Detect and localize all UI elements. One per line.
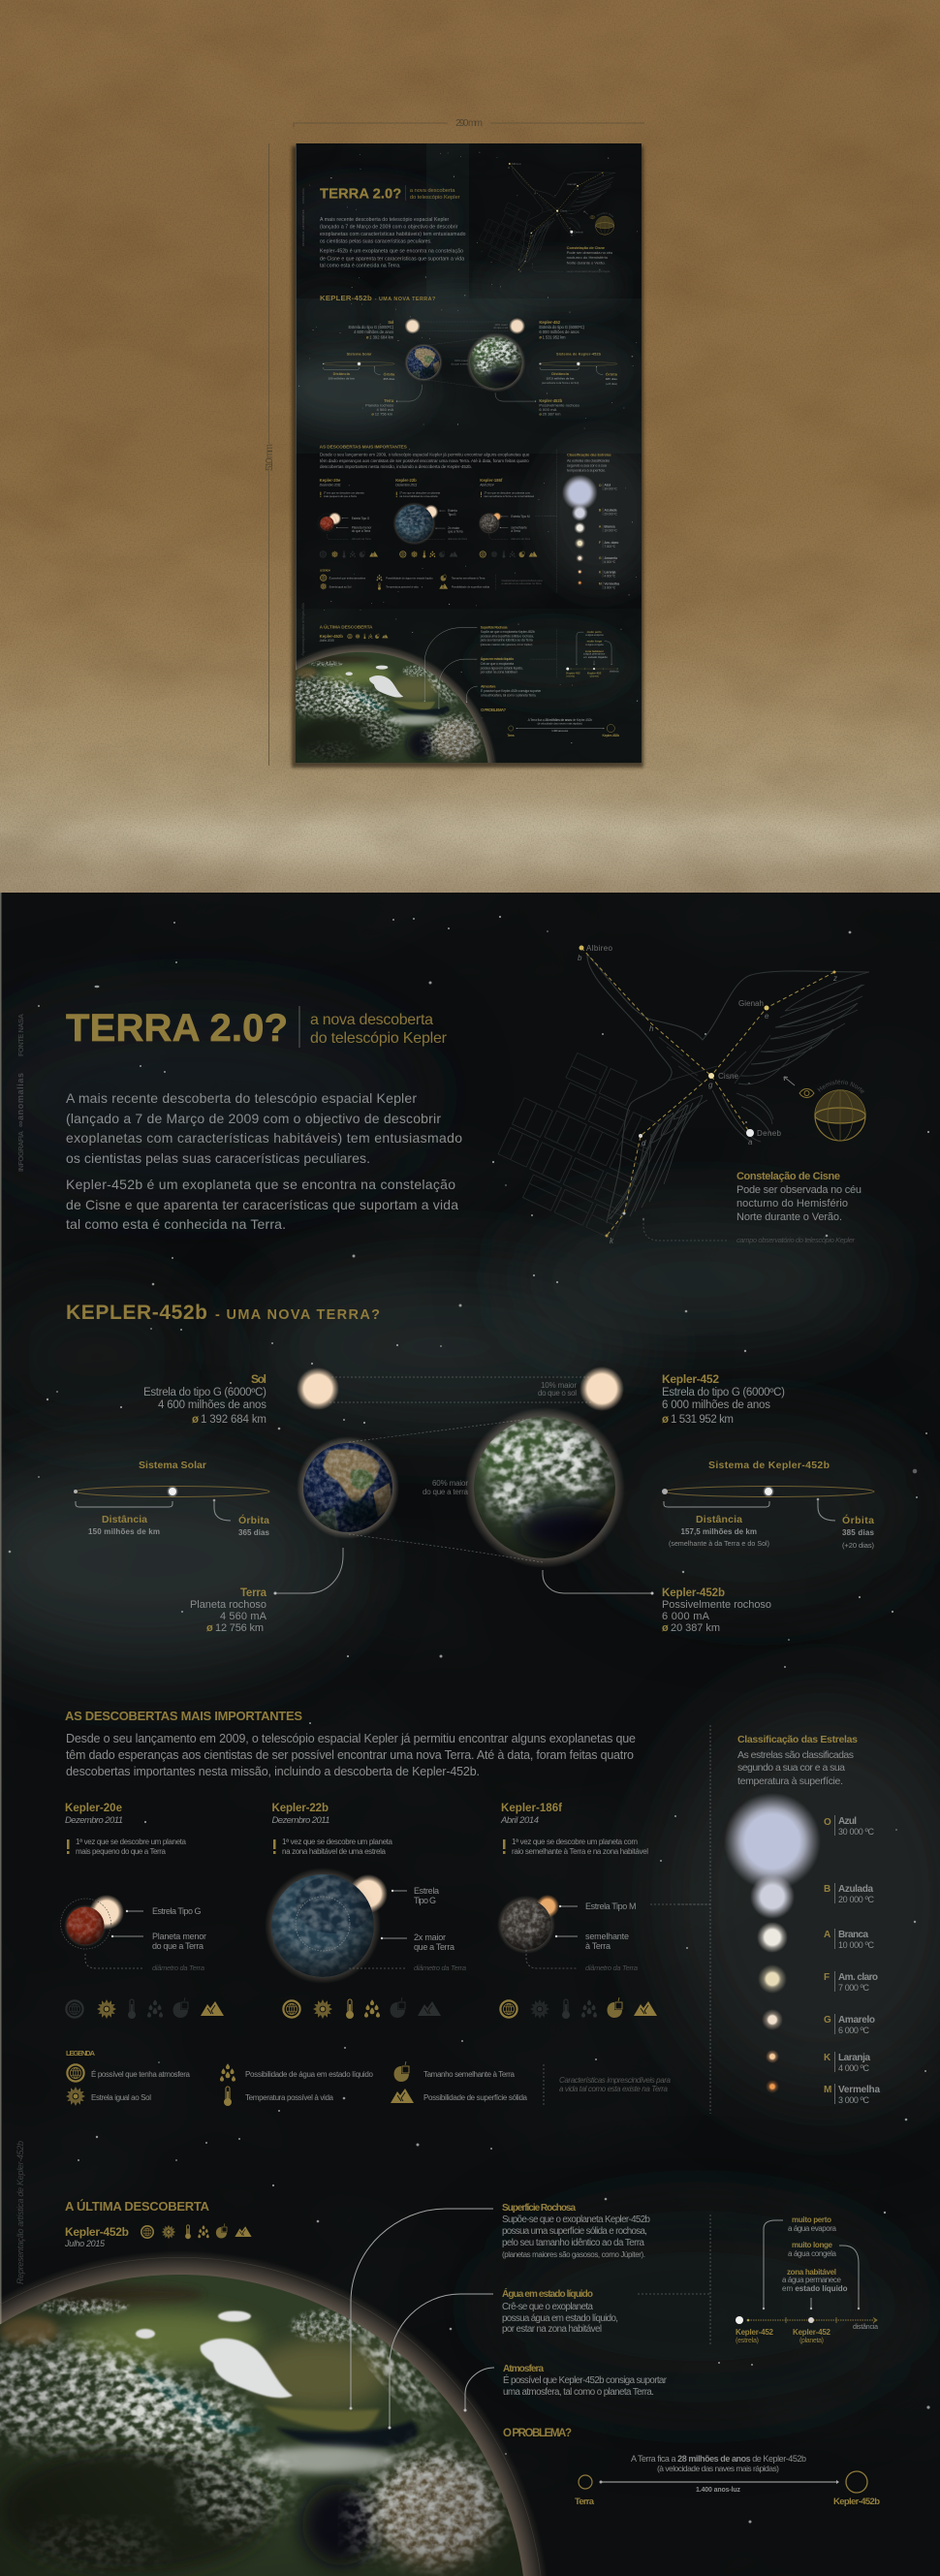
orbit (74, 1487, 269, 1496)
note: 1ª vez que se descobre um planeta (282, 1838, 393, 1846)
Kepler-452b info: 6 000 mA (662, 1611, 710, 1622)
callout: Água em estado líquido: Água em estado líquido (502, 2287, 593, 2300)
labels: à Terra (585, 1941, 611, 1951)
land colours (0, 2284, 494, 2573)
O problema: O PROBLEMA? (503, 2428, 572, 2439)
section: A última descoberta: Julho 2015 (64, 2239, 106, 2248)
habitable zone diagram: em estado líquido (782, 2284, 848, 2293)
Terra info: 4 560 mA (220, 1611, 267, 1622)
Kepler-452 info (662, 1372, 785, 1426)
callout: Atmosfera (463, 2364, 668, 2411)
Terra info: Planeta rochoso (190, 1599, 266, 1611)
planet (497, 1896, 555, 1954)
intro text: de Cisne e que aparenta ter caracerísticas que suportam a vida (66, 1197, 458, 1212)
note: 1ª vez que se descobre um planeta com (512, 1838, 638, 1846)
clouds (0, 2300, 504, 2565)
star (89, 1895, 124, 1930)
callout: Atmosfera: Atmosfera (503, 2364, 544, 2374)
callout: Superfície Rochosa: (planetas maiores são gasosos, como Júpiter). (502, 2250, 645, 2259)
callout: Atmosfera: É possível que Kepler-452b consiga suportar (503, 2375, 668, 2386)
title: a nova descoberta (310, 1012, 433, 1028)
legend: LEGENDA (66, 2049, 96, 2058)
discovery: Kepler-22b: Dezembro 2011 (271, 1815, 329, 1826)
labels: Estrela Tipo G (152, 1906, 202, 1916)
main infographic (0, 893, 940, 2576)
labels (526, 1901, 710, 1972)
panel: star classification: Classificação das Estrelas (737, 1734, 858, 1745)
poster miniature (274, 143, 659, 763)
class labels (824, 1815, 880, 2105)
Sistema de Kepler-452b diagram: 157,5 milhões de km (680, 1527, 757, 1536)
star sizes (724, 1793, 821, 2093)
characteristics icons (66, 1997, 224, 2019)
discovery: Kepler-186f (497, 1803, 710, 2019)
dimension: width 290 mm (294, 118, 644, 129)
constellation labels: g (708, 1081, 713, 1089)
constellation labels: Gienah (738, 999, 764, 1008)
swan outline (587, 955, 869, 1223)
Terra circle (579, 2475, 592, 2489)
Sol info: Sol (251, 1372, 266, 1386)
section: As descobertas: AS DESCOBERTAS MAIS IMPORTANTES (65, 1709, 302, 1723)
O problema: Terra (575, 2497, 595, 2507)
legend: a vida tal como esta existe na Terra (559, 2085, 669, 2093)
discovery: Kepler-186f: Abril 2014 (500, 1815, 539, 1826)
callout: Água em estado líquido: possua água em estado líquido, (502, 2313, 618, 2324)
note (503, 1838, 648, 1856)
class labels: Azul (838, 1816, 857, 1827)
comparison notes: do que a terra (423, 1488, 469, 1496)
poster shadow (292, 146, 643, 768)
intro text: A mais recente descoberta do telescópio espacial Kepler (66, 1090, 417, 1106)
callout: Superfície Rochosa: possua uma superfície sólida e rochosa, (502, 2226, 647, 2237)
section: As descobertas (65, 1709, 636, 1778)
comparison notes: do que o sol (538, 1389, 577, 1398)
Sistema de Kepler-452b diagram: 385 dias (842, 1528, 875, 1537)
distance axis (736, 2316, 877, 2324)
panel: star classification: temperatura à superfície. (737, 1775, 843, 1787)
constellation caption: campo observatório do telescópio Kepler (736, 1236, 855, 1244)
class labels: K (824, 2053, 831, 2063)
note (67, 1838, 187, 1856)
Terra info: 12 756 km (215, 1622, 264, 1634)
habitable zone diagram: a água congela (788, 2249, 837, 2258)
Terra info: ø (206, 1622, 213, 1634)
icon: eye (799, 1089, 814, 1097)
Kepler-452b info: ø (662, 1622, 669, 1634)
constellation labels: a (748, 1138, 753, 1147)
callout: Água em estado líquido (388, 2287, 618, 2429)
intro text: (lançado a 7 de Março de 2009 com o objectivo de descobrir (66, 1111, 441, 1126)
dimension: width 290 mm: 290 mm (455, 118, 483, 129)
comparison notes: 10% maior (541, 1381, 577, 1390)
Sol info: 4 600 milhões de anos (158, 1399, 266, 1411)
comparison notes (423, 1381, 577, 1496)
Kepler-452b info: Possivelmente rochoso (662, 1599, 771, 1611)
note: mais pequeno do que a Terra (76, 1847, 167, 1856)
intro text: exoplanetas com características habitáveis) tem entusiasmado (66, 1130, 462, 1146)
constellation caption: Norte durante o Verão. (736, 1211, 842, 1223)
comparison notes: 60% maior (432, 1479, 468, 1488)
labels: diâmetro da Terra (585, 1963, 638, 1972)
habitable zone diagram: a água permanece (782, 2276, 842, 2284)
note: 1ª vez que se descobre um planeta (76, 1838, 187, 1846)
labels (349, 1886, 466, 1972)
Terra info (190, 1548, 343, 1634)
class labels: Azulada (838, 1884, 873, 1895)
Sistema de Kepler-452b diagram: (semelhante à da Terra e do Sol) (669, 1541, 769, 1548)
Sistema de Kepler-452b diagram (662, 1460, 875, 1550)
legend: Características imprescindíveis para (559, 2076, 672, 2085)
O problema: (à velocidade das naves mais rápidas) (657, 2464, 779, 2473)
Sistema Solar diagram: Distância (102, 1514, 147, 1525)
note (273, 1838, 393, 1856)
callout: Superfície Rochosa: Supõe-se que o exoplaneta Kepler-452b (502, 2215, 651, 2225)
hemisphere diagram: Hemisfério Norte (818, 1080, 864, 1093)
Kepler circle (846, 2471, 867, 2493)
labels: diâmetro da Terra (414, 1963, 466, 1972)
class labels: 7 000 ºC (838, 1983, 870, 1993)
section: As descobertas: Desde o seu lançamento em 2009, o telescópio espacial Kepler já permitiu encontrar alguns exoplanetas que (66, 1732, 636, 1745)
characteristics icons (283, 1997, 441, 2019)
Kepler field grid (486, 1041, 677, 1240)
legend: Possibilidade de água em estado líquido (245, 2070, 374, 2079)
labels: Tipo G (414, 1896, 436, 1905)
class labels: Branca (838, 1930, 868, 1940)
legend icons (66, 2061, 414, 2106)
panel: star classification: segundo a sua cor e a sua (737, 1762, 845, 1774)
O problema (503, 2428, 880, 2507)
class labels: 3 000 ºC (838, 2095, 870, 2105)
section: As descobertas: descobertas importantes nesta missão, incluindo a descoberta de Kepler-452b. (66, 1765, 480, 1778)
section: A última descoberta (64, 2199, 252, 2248)
labels: Estrela (414, 1886, 439, 1896)
O problema: Kepler-452b (833, 2497, 880, 2507)
class labels: M (824, 2085, 831, 2095)
ice cap (201, 2339, 293, 2398)
class labels: B (824, 1884, 830, 1895)
habitable zone diagram: muito longe (792, 2241, 833, 2249)
class labels: 6 000 ºC (838, 2026, 870, 2035)
distance arrow (599, 2480, 839, 2484)
habitable zone diagram: (estrela) (736, 2338, 759, 2344)
constellation labels: Cisne (718, 1072, 739, 1081)
constellation stars (580, 946, 835, 1237)
class labels: A (824, 1930, 830, 1940)
constellation labels: e (765, 1012, 769, 1021)
constellation labels: Deneb (757, 1129, 782, 1138)
side credits: ∞anomalias (16, 1073, 25, 1127)
class labels: Laranja (838, 2053, 870, 2063)
constellation caption: nocturno do Hemisfério (736, 1198, 848, 1209)
Kepler-452b info: 20 387 km (671, 1622, 720, 1634)
Sistema de Kepler-452b diagram: (+20 dias) (842, 1541, 874, 1550)
callout: Superfície Rochosa (349, 2203, 651, 2409)
star (349, 1874, 388, 1913)
labels (85, 1906, 206, 1972)
labels: semelhante (585, 1932, 629, 1941)
heading: Kepler-452b (66, 1302, 380, 1324)
Kepler-452 star (580, 1367, 624, 1411)
labels: do que a Terra (152, 1941, 204, 1951)
Sol star (297, 1367, 339, 1410)
side credits: FONTE NASA (16, 1013, 25, 1056)
title (66, 1006, 448, 1050)
Kepler-452 info: Estrela do tipo G (6000ºC) (662, 1387, 785, 1398)
space background (0, 893, 940, 2576)
Sistema Solar diagram: Órbita (238, 1514, 269, 1526)
Sol info (143, 1372, 266, 1426)
Sistema Solar diagram: 365 dias (238, 1528, 270, 1537)
legend (66, 2049, 672, 2106)
class labels: O (824, 1817, 831, 1828)
section: A última descoberta: Kepler-452b (65, 2225, 129, 2239)
labels: que a Terra (414, 1942, 454, 1952)
constellation labels: b (578, 954, 582, 962)
class labels: 4 000 ºC (838, 2063, 870, 2073)
Sol info: Estrela do tipo G (6000ºC) (143, 1387, 266, 1398)
constellation lines (581, 948, 834, 1236)
characteristics icons (500, 1997, 657, 2019)
title: TERRA 2.0? (66, 1007, 288, 1050)
habitable zone diagram (638, 2215, 878, 2345)
class labels: Amarelo (838, 2015, 875, 2026)
size comparison lines (329, 1377, 593, 1562)
Sol info: ø (192, 1414, 199, 1426)
callout: Superfície Rochosa: Superfície Rochosa (502, 2203, 576, 2214)
class labels: Vermelha (838, 2085, 880, 2095)
constellation labels: k (610, 1237, 614, 1245)
class labels: G (824, 2015, 831, 2026)
class labels: Am. claro (838, 1972, 878, 1983)
constellation labels (578, 944, 837, 1245)
callout: Atmosfera: uma atmosfera, tal como o planeta Terra. (503, 2387, 654, 2398)
side credits (16, 1013, 25, 1172)
arrow (784, 1077, 795, 1085)
O problema: 1.400 anos-luz (696, 2487, 740, 2494)
legend: Possibilidade de superfície sólida (423, 2093, 528, 2102)
star field (9, 916, 930, 2524)
Sistema Solar diagram (74, 1460, 270, 1537)
intro text (66, 1090, 462, 1232)
Sistema de Kepler-452b diagram: Distância (696, 1514, 742, 1525)
class labels: 10 000 ºC (838, 1940, 874, 1950)
habitable zone diagram: zona habitável (787, 2268, 836, 2277)
section: A última descoberta: A ÚLTIMA DESCOBERTA (65, 2199, 210, 2214)
Earth planet (297, 1436, 399, 1539)
labels: Estrela Tipo M (585, 1901, 636, 1911)
legend: Tamanho semelhante à Terra (423, 2070, 516, 2079)
Kepler-452b info (543, 1570, 771, 1634)
discovery: Kepler-20e (60, 1803, 224, 2019)
Kepler-452 info: Kepler-452 (662, 1372, 719, 1386)
planet (265, 1868, 381, 1984)
Sistema de Kepler-452b diagram: Órbita (842, 1514, 874, 1526)
labels: diâmetro da Terra (152, 1963, 204, 1972)
sand background (0, 0, 940, 893)
Kepler-452 info: 6 000 milhões de anos (662, 1399, 770, 1411)
Kepler-452 info: 1 531 952 km (671, 1414, 734, 1426)
star (536, 1895, 559, 1918)
panel: star classification (678, 1725, 880, 2114)
habitable zone diagram: a água evapora (788, 2224, 837, 2233)
class labels: 30 000 ºC (838, 1827, 874, 1837)
Kepler-452 info: ø (662, 1414, 669, 1426)
dimension: height 510 mm: 510 mm (265, 444, 275, 471)
constellation caption: Pode ser observada no céu (736, 1184, 862, 1196)
big planet Kepler-452b (0, 2248, 581, 2576)
habitable zone diagram: distância (853, 2324, 878, 2331)
legend: Estrela igual ao Sol (91, 2093, 151, 2102)
legend: É possível que tenha atmosfera (91, 2070, 191, 2079)
callout: Água em estado líquido: Crê-se que o exoplaneta (502, 2302, 594, 2312)
artwork credit: Representação artística de Kepler-452b (16, 2141, 25, 2284)
intro text: tal como esta é conhecida na Terra. (66, 1216, 286, 1232)
Sistema de Kepler-452b diagram: Sistema de Kepler-452b (708, 1460, 830, 1471)
intro text: Kepler-452b é um exoplaneta que se encontra na constelação (66, 1177, 455, 1192)
characteristics icons (141, 2223, 252, 2239)
constellation caption: Constelação de Cisne (736, 1171, 840, 1182)
orbit (662, 1487, 874, 1496)
Terra info: Terra (240, 1587, 267, 1599)
note: raio semelhante à Terra e na zona habitável (512, 1847, 648, 1856)
heading: Kepler-452b: KEPLER-452b (66, 1302, 207, 1324)
O problema: A Terra fica a 28 milhões de anos de Kepler-452b (631, 2454, 806, 2464)
Kepler-452b info: Kepler-452b (662, 1587, 725, 1599)
Kepler-452b planet (464, 1407, 625, 1568)
discovery: Kepler-22b (265, 1803, 466, 2019)
constellation labels: d (642, 1139, 646, 1147)
class labels: F (824, 1972, 830, 1983)
habitable zone diagram: Kepler-452 (793, 2328, 831, 2337)
panel: star classification: As estrelas são classificadas (737, 1749, 854, 1761)
discovery: Kepler-22b: Kepler-22b (271, 1803, 329, 1814)
constellation labels: z (832, 974, 837, 983)
poster fold panels (296, 143, 642, 764)
constellation labels: Albireo (586, 944, 613, 953)
note: na zona habitável de uma estrela (282, 1847, 387, 1856)
callout: Superfície Rochosa: pelo seu tamanho idêntico ao da Terra (502, 2238, 645, 2248)
Sistema Solar diagram: 150 milhões de km (88, 1527, 160, 1536)
habitable zone diagram: Kepler-452 (736, 2328, 774, 2337)
callout: Água em estado líquido: por estar na zona habitável (502, 2324, 602, 2335)
discovery: Kepler-186f: Kepler-186f (501, 1803, 562, 1814)
labels: Planeta menor (152, 1932, 206, 1941)
title: do telescópio Kepler (310, 1030, 448, 1047)
heading: Kepler-452b: - UMA NOVA TERRA? (215, 1307, 380, 1323)
habitable zone diagram: muito perto (792, 2215, 831, 2224)
swan constellation (578, 944, 869, 1245)
planet (64, 1904, 107, 1947)
labels: 2x maior (414, 1932, 446, 1942)
constellation caption (642, 1171, 862, 1244)
Sol info: 1 392 684 km (201, 1414, 266, 1426)
discovery: Kepler-20e: Dezembro 2011 (65, 1815, 123, 1826)
side credits: INFOGRAFIA (16, 1130, 25, 1172)
intro text: os cientistas pelas suas caracerísticas peculiares. (66, 1150, 370, 1166)
Sistema Solar diagram: Sistema Solar (139, 1460, 206, 1471)
class labels: 20 000 ºC (838, 1895, 874, 1904)
section: As descobertas: têm dado esperanças aos cientistas de ser possível encontrar uma nova Terra. Até à data, foram feitas quatro (66, 1748, 634, 1762)
diameter ring (60, 1899, 110, 1949)
habitable zone diagram: (planeta) (799, 2338, 824, 2344)
constellation labels: h (649, 1024, 654, 1033)
discovery: Kepler-20e: Kepler-20e (65, 1803, 122, 1814)
hemisphere diagram (783, 1076, 866, 1142)
legend: Temperatura possível à vida (245, 2093, 334, 2102)
